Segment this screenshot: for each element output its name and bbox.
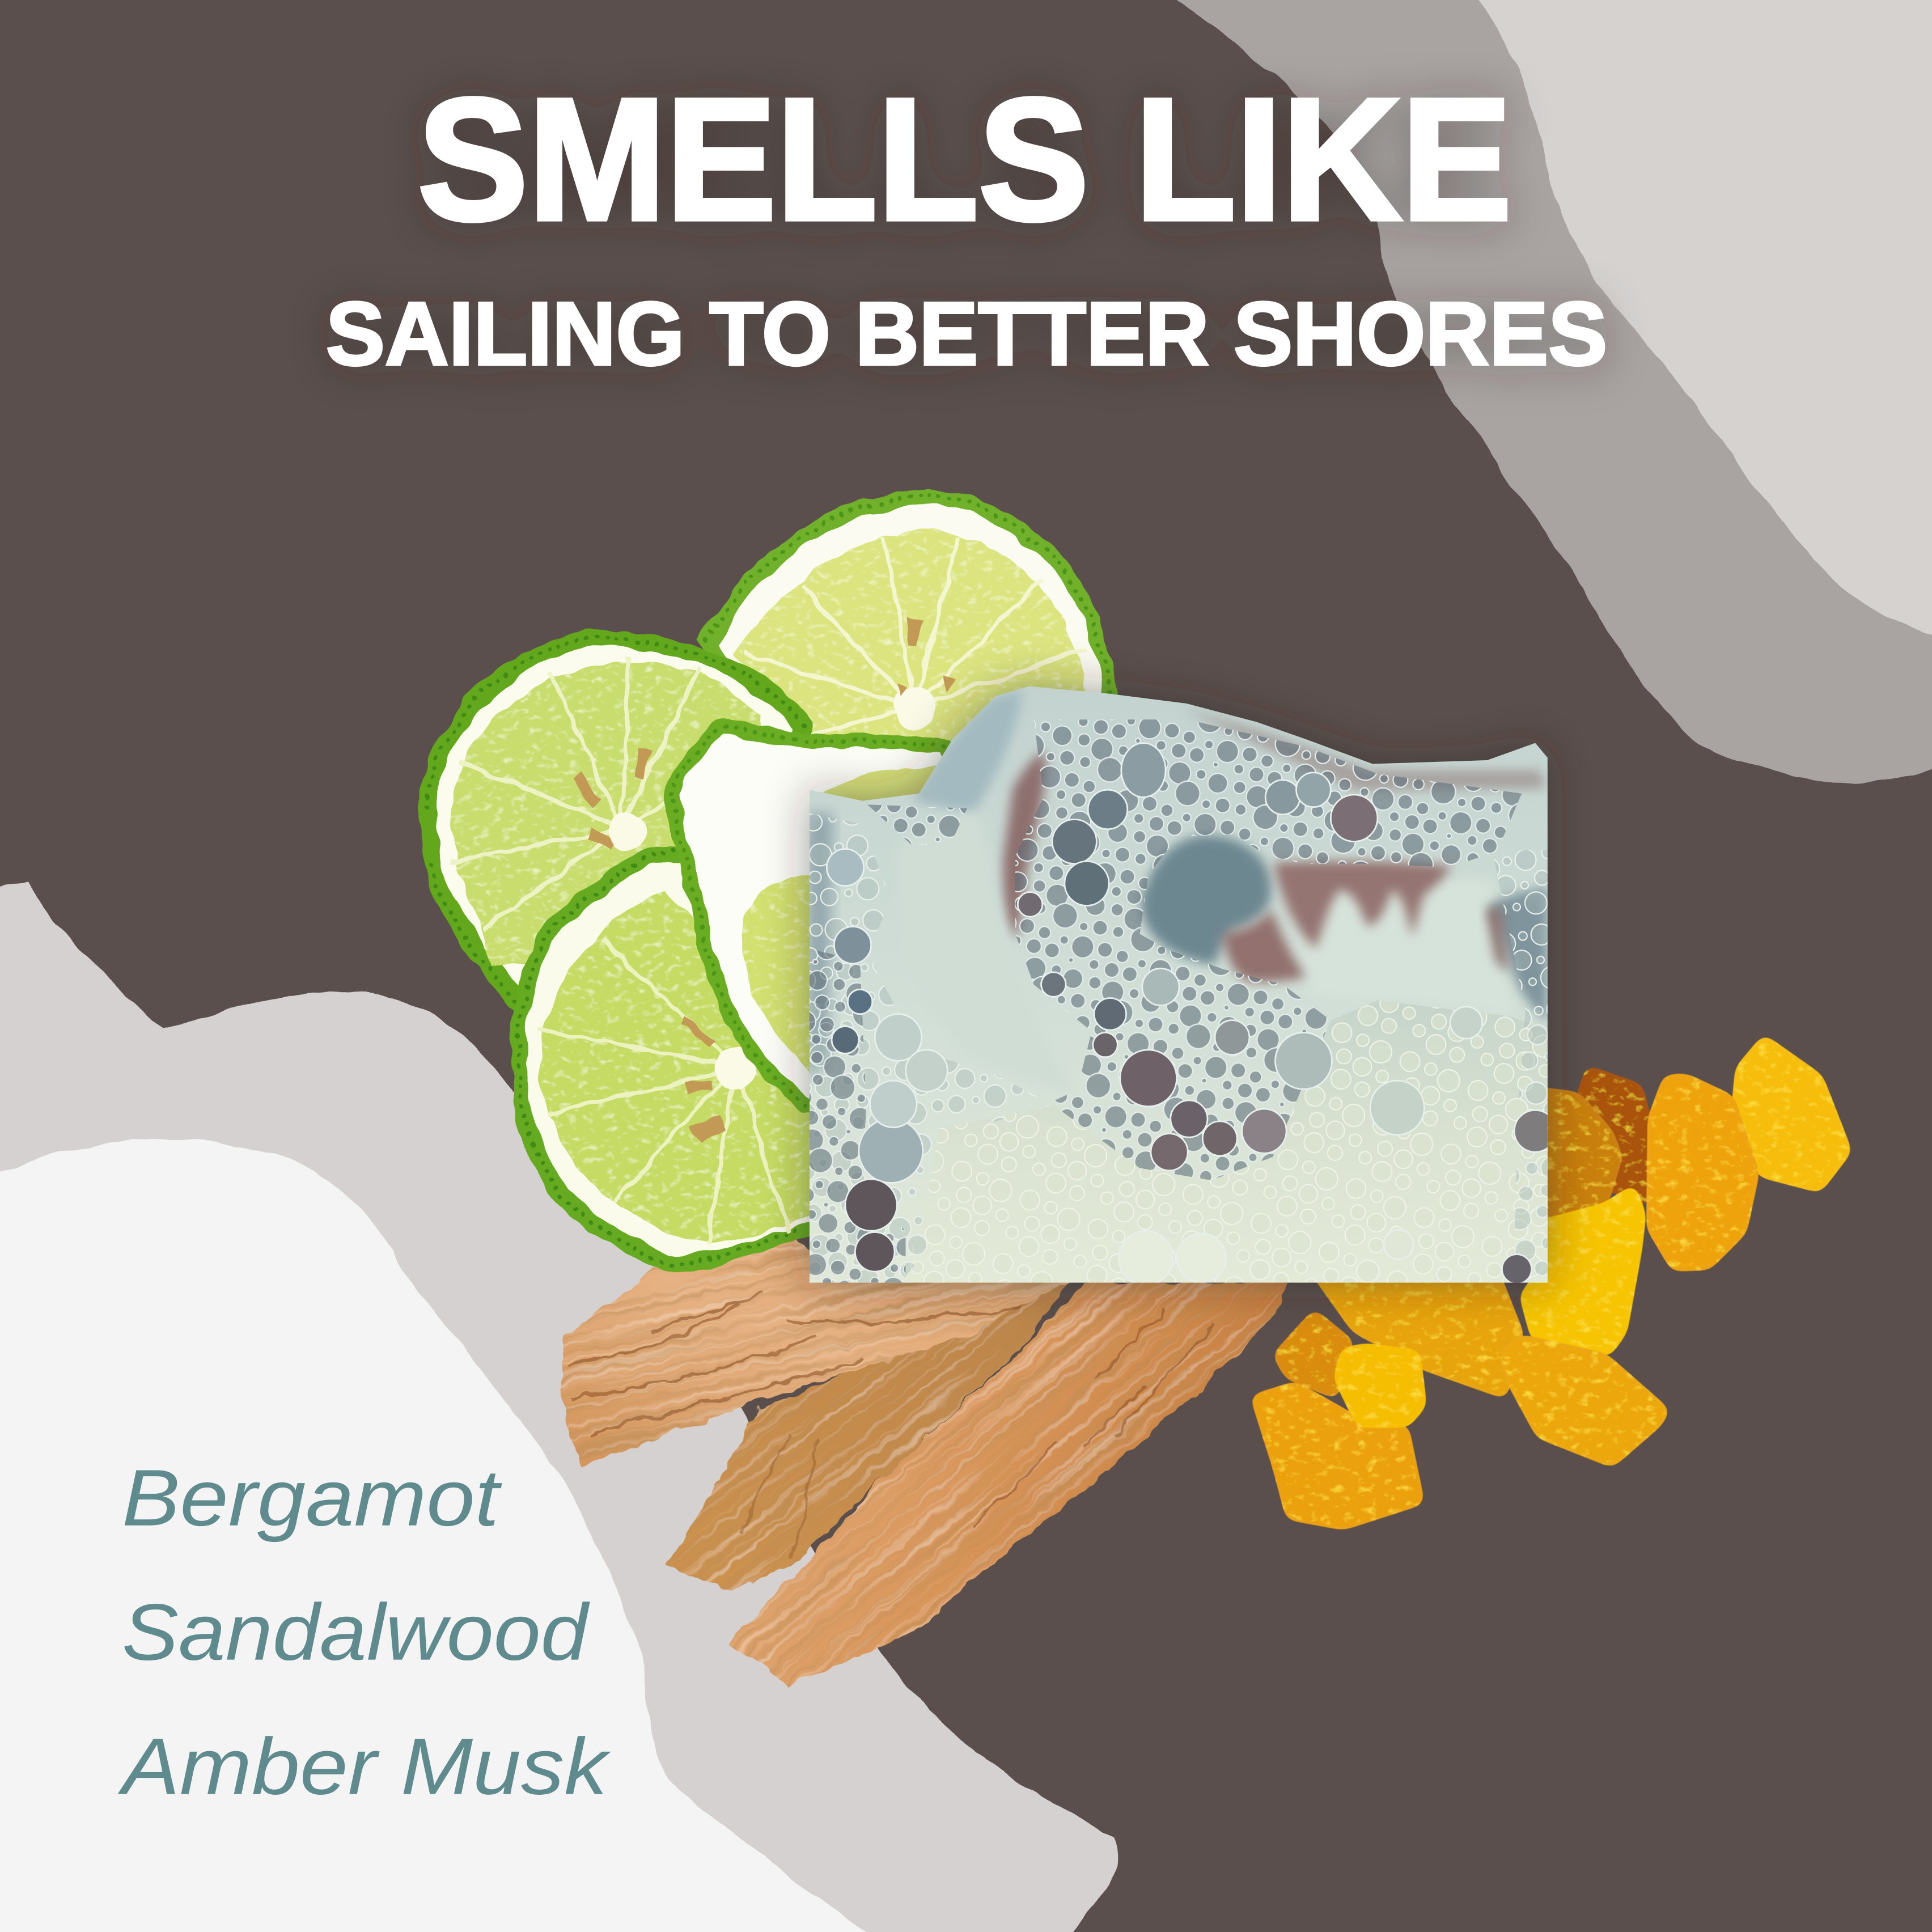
backdrop shape: top right medium: [1177, 0, 1932, 782]
amber: dark orange back: [1577, 1071, 1647, 1201]
scent: bergamot: Bergamot: [122, 1453, 502, 1543]
bergamot slice: front: [511, 845, 862, 1273]
backdrop shape: top right light: [1478, 0, 1932, 641]
amber: middle: [1314, 1269, 1519, 1393]
mauve drips: [1274, 861, 1451, 949]
wood stick: front: [528, 1006, 1488, 1932]
title: SMELLS LIKE: [418, 62, 1512, 256]
pale soap left: [897, 813, 1074, 1094]
amber: tall yellow: [1524, 1190, 1641, 1351]
amber resin pieces: [1256, 1040, 1847, 1526]
bergamot slice: left: [418, 630, 811, 1013]
scent list: [118, 1453, 611, 1811]
backdrop shape: bottom left light: [0, 1138, 905, 1932]
soap bar: [801, 677, 1558, 1294]
scent: sandalwood: Sandalwood: [122, 1587, 590, 1677]
bergamot slice: top: [697, 489, 1117, 789]
blue left edge: [807, 813, 833, 1084]
amber: left: [1278, 1315, 1349, 1393]
backdrop shape: bottom left medium: [0, 880, 1119, 1932]
blue patch: [1141, 835, 1271, 965]
soap foam: right column: [1492, 850, 1548, 1283]
bergamot slices: [418, 489, 1117, 1273]
pale soap right: [1281, 879, 1512, 1016]
amber: small yellow: [1338, 1348, 1422, 1423]
soap foam: pale lather: [901, 1001, 1548, 1283]
amber: right: [1651, 1078, 1755, 1266]
wood stick: back: [516, 1089, 1216, 1786]
bergamot slice: middle rind cut: [672, 727, 986, 1109]
blue top slope: [912, 690, 1023, 813]
mauve top edge: [1183, 709, 1547, 791]
amber: bottom right: [1505, 1340, 1664, 1463]
soap foam: left light band: [810, 813, 1053, 1283]
right edge blue and mauve: [1489, 887, 1548, 1023]
scent: amber musk: Amber Musk: [118, 1722, 611, 1811]
sandalwood sticks: [509, 1006, 1488, 1932]
amber: bottom left: [1256, 1386, 1420, 1526]
soap foam: top notch: [867, 804, 967, 848]
soap bubbles: [827, 743, 1556, 1285]
amber: top right: [1735, 1040, 1847, 1188]
soap foam: dark left column: [810, 949, 906, 1283]
amber: orange: [1540, 1092, 1618, 1223]
soap swirl: grey and mauve patches: [807, 690, 1548, 1094]
mauve patch: [1222, 909, 1306, 982]
wood stick: top left: [509, 1115, 1122, 1577]
soap base: [801, 677, 1558, 1294]
soap foam: dark bubbled band: [1015, 719, 1522, 1180]
subtitle: SAILING TO BETTER SHORES: [326, 283, 1607, 384]
mauve stripe: [1003, 752, 1046, 939]
